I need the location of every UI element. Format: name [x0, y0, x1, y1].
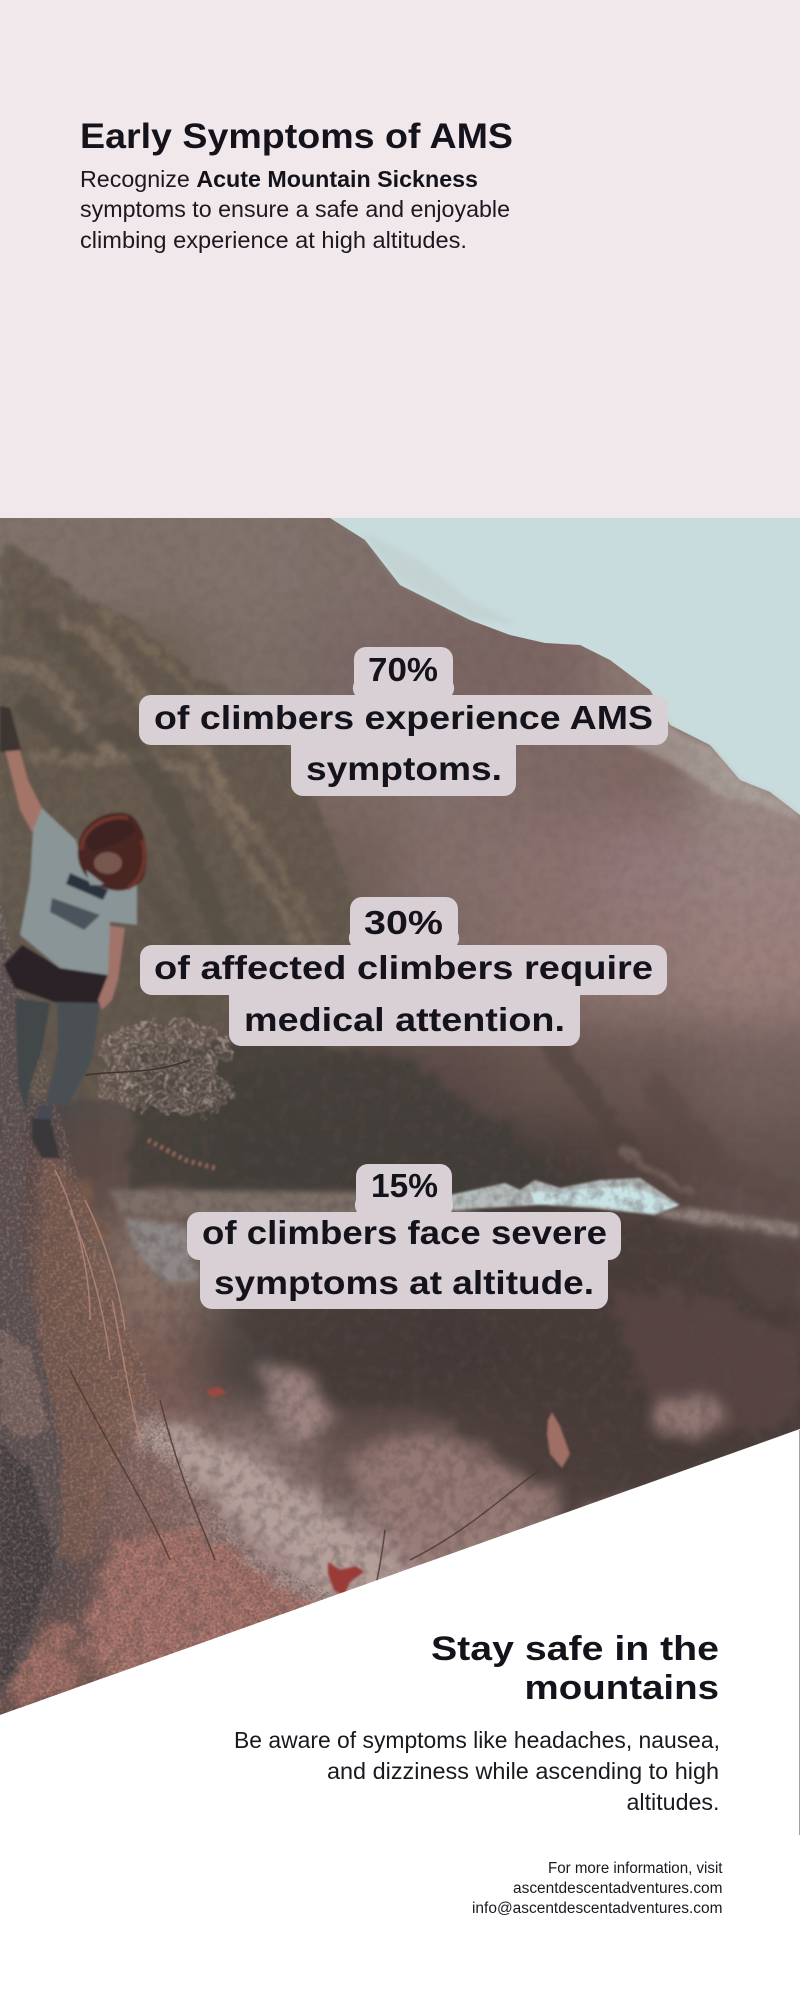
edge line — [799, 1430, 800, 1835]
footer contact: ascentdescentadventures.com — [513, 1880, 722, 1897]
stat 2: 30 percent: medical attention. — [244, 1001, 565, 1038]
climber — [0, 706, 146, 1158]
near forested ridge — [0, 544, 352, 1102]
stat 3: 15 percent — [187, 1164, 621, 1309]
texture: grass speckle — [0, 901, 335, 1715]
stat 1: 70 percent: symptoms. — [306, 750, 502, 787]
land tones — [0, 518, 800, 1715]
texture: overall grain — [192, 748, 786, 1566]
closing heading — [431, 1630, 719, 1707]
closing heading: mountains — [524, 1669, 719, 1707]
closing text: altitudes. — [626, 1789, 720, 1815]
footer contact — [472, 1860, 723, 1917]
distant hazy ridge — [360, 530, 800, 822]
footer contact: info@ascentdescentadventures.com — [472, 1900, 722, 1917]
intro text: Recognize Acute Mountain Sickness — [80, 166, 478, 192]
upper forest — [124, 1039, 544, 1191]
stat 3: 15 percent: of climbers face severe — [202, 1214, 607, 1251]
icon: shorts — [4, 945, 108, 1003]
dry stems — [55, 1170, 540, 1610]
red leaves — [205, 1387, 570, 1596]
stat 3: 15 percent: 15% — [371, 1167, 438, 1204]
river valley — [110, 1190, 800, 1282]
ridge lines on the mountain — [2, 608, 324, 945]
photo base tones — [0, 518, 800, 1715]
sky — [330, 518, 800, 815]
intro text — [80, 166, 510, 253]
water — [450, 1178, 680, 1215]
stat 2: 30 percent: of affected climbers require — [154, 949, 653, 986]
closing heading: Stay safe in the — [431, 1630, 719, 1668]
stat 1: 70 percent: 70% — [368, 651, 438, 688]
left rock — [0, 930, 62, 1700]
icon: right forearm — [98, 925, 125, 1010]
panel: mountain photo illustration — [0, 518, 800, 1715]
lower forest — [200, 1218, 800, 1510]
intro text: climbing experience at high altitudes. — [80, 227, 467, 253]
foliage near climber — [85, 1017, 236, 1172]
stat 1: 70 percent: of climbers experience AMS — [154, 699, 653, 736]
panel: header background — [0, 0, 800, 518]
icon: t-shirt — [20, 808, 137, 975]
icon: arm and glove — [0, 706, 44, 832]
stat 2: 30 percent: 30% — [364, 904, 443, 941]
intro text: symptoms to ensure a safe and enjoyable — [80, 196, 510, 222]
icon: legs — [15, 998, 100, 1158]
stat pills — [140, 897, 667, 1046]
icon: hair and face — [78, 813, 146, 891]
stat pills — [187, 1164, 621, 1309]
footer contact: For more information, visit — [548, 1860, 723, 1877]
title: Early Symptoms of AMS — [80, 117, 513, 156]
closing text — [234, 1727, 720, 1815]
closing text: Be aware of symptoms like headaches, nausea, — [234, 1727, 720, 1753]
closing text: and dizziness while ascending to high — [327, 1758, 719, 1784]
fog clouds — [115, 1362, 726, 1610]
stat 2: 30 percent — [140, 897, 667, 1046]
stat 1: 70 percent — [139, 647, 668, 796]
right slopes — [540, 1046, 695, 1196]
foreground grass — [8, 1140, 320, 1715]
stat pills — [139, 647, 668, 796]
texture: forest grain — [12, 596, 784, 1703]
stat 3: 15 percent: symptoms at altitude. — [214, 1264, 594, 1301]
